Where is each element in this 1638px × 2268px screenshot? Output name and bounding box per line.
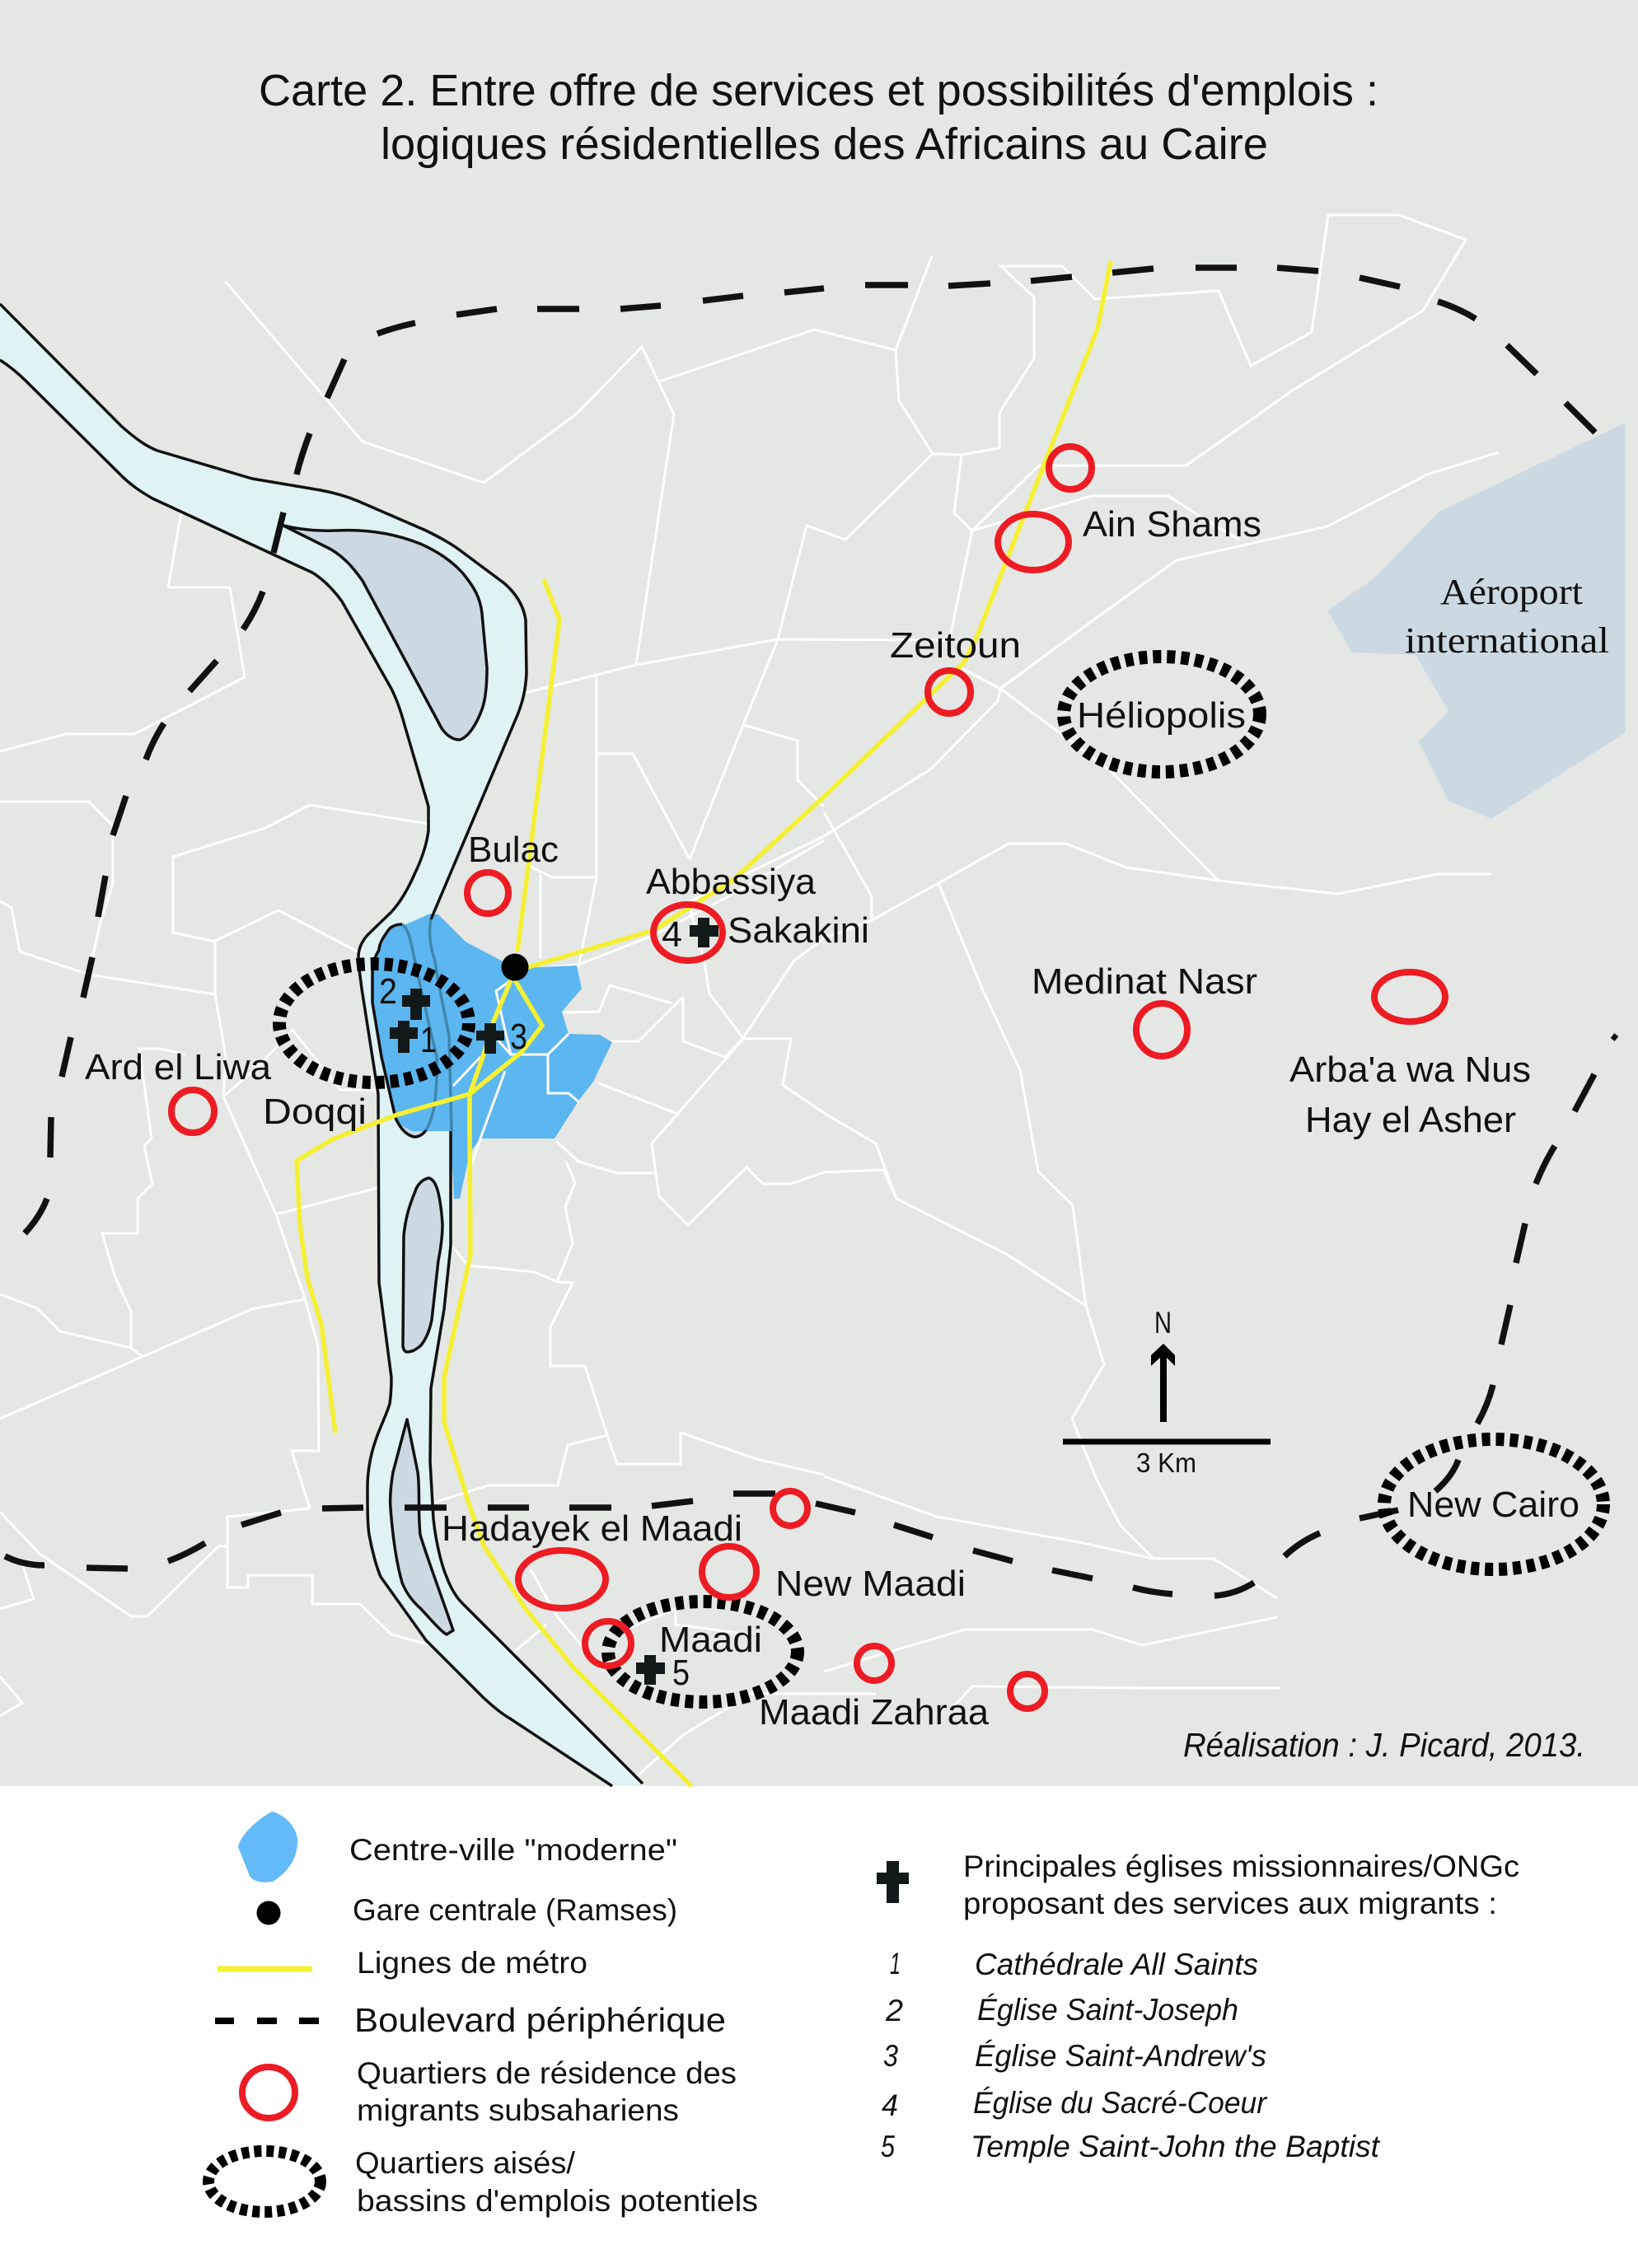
river banks [0, 304, 643, 1786]
Gezira island [372, 924, 437, 1137]
title: logiques résidentielles des Africains au Caire [381, 119, 1268, 169]
place labels: Doqqi [263, 1092, 367, 1132]
legend: wealthy districts: Quartiers aisés/ [355, 2146, 576, 2180]
title [259, 66, 1378, 169]
downtown modern centre [372, 914, 612, 1199]
wealthy districts (dashed ellipses) [279, 657, 1603, 1702]
legend: church list: Église Saint-Joseph [977, 1993, 1238, 2027]
legend: church list: 3 [883, 2039, 898, 2073]
legend: migrant districts: Quartiers de résidence des [357, 2056, 737, 2090]
metro lines [297, 261, 1111, 1786]
panel: legend [208, 1812, 1519, 2218]
river Nile [0, 304, 646, 1786]
legend: church list: Église Saint-Andrew's [975, 2039, 1266, 2073]
legend: churches: proposant des services aux migrants : [963, 1887, 1497, 1920]
downtown district boundaries [453, 980, 579, 1170]
island south of Gezira [403, 1178, 442, 1352]
place labels: Zeitoun [890, 625, 1021, 666]
legend: church list: 1 [890, 1947, 901, 1980]
peripheral ring road [5, 268, 1617, 1596]
legend: migrant districts [242, 2056, 737, 2127]
north arrow and scale bar [1063, 1306, 1271, 1478]
north arrow and scale bar: N [1154, 1306, 1172, 1340]
legend: churches [877, 1849, 1519, 1920]
place labels: 2 [379, 971, 397, 1012]
panel: map [0, 0, 1638, 1786]
legend: church list: 2 [885, 1994, 903, 2027]
legend: church list: Église du Sacré-Coeur [973, 2086, 1268, 2120]
legend: ring road: Boulevard périphérique [354, 2001, 726, 2039]
place labels: Medinat Nasr [1032, 961, 1257, 1002]
place labels: Hay el Asher [1305, 1100, 1516, 1140]
legend: metro lines [218, 1946, 587, 1980]
place labels: Ard el Liwa [85, 1047, 272, 1087]
place labels: Bulac [468, 830, 559, 870]
place labels: Sakakini [728, 910, 869, 951]
place labels: Hadayek el Maadi [442, 1508, 742, 1549]
migrant residential districts (red circles) [171, 447, 1445, 1709]
airport label: Aéroport [1440, 572, 1583, 612]
place labels: 1 [420, 1020, 437, 1060]
place labels: Maadi Zahraa [759, 1692, 990, 1733]
legend: ring road [215, 2001, 726, 2039]
legend: modern downtown [238, 1812, 677, 1882]
legend: church list: 5 [881, 2130, 895, 2163]
legend: central station: Gare centrale (Ramses) [353, 1893, 677, 1927]
island south [391, 1419, 453, 1634]
place labels: Héliopolis [1077, 695, 1246, 736]
legend: migrant districts: migrants subsahariens [357, 2093, 679, 2127]
legend: wealthy districts [208, 2146, 758, 2218]
credit: Réalisation : J. Picard, 2013. [1183, 1726, 1585, 1764]
place labels [85, 504, 1580, 1733]
north arrow and scale bar: 3 Km [1136, 1447, 1196, 1478]
legend: wealthy districts: bassins d'emplois potentiels [357, 2184, 758, 2218]
road network [0, 215, 1499, 1777]
central station [501, 954, 529, 980]
legend: modern downtown: Centre-ville "moderne" [349, 1833, 677, 1867]
north island [283, 526, 487, 740]
place labels: New Maadi [775, 1564, 966, 1604]
place labels: Maadi [659, 1620, 762, 1660]
place labels: 5 [672, 1653, 690, 1693]
place labels: Arba'a wa Nus [1289, 1050, 1531, 1090]
place labels: 3 [510, 1017, 527, 1057]
legend: church list [881, 1947, 1381, 2163]
legend: church list: Cathédrale All Saints [975, 1948, 1258, 1981]
airport area [1327, 423, 1626, 819]
title: Carte 2. Entre offre de services et possibilités d'emplois : [259, 66, 1378, 115]
place labels: 4 [662, 914, 682, 955]
place labels: Ain Shams [1083, 504, 1261, 545]
place labels: New Cairo [1407, 1485, 1580, 1525]
church crosses [390, 918, 718, 1685]
legend: church list: 4 [882, 2088, 898, 2122]
legend: church list: Temple Saint-John the Baptist [971, 2130, 1381, 2163]
place labels: Abbassiya [646, 862, 817, 902]
airport label: international [1405, 620, 1609, 661]
airport label [1405, 572, 1609, 661]
legend: metro lines: Lignes de métro [357, 1946, 587, 1980]
legend: churches: Principales églises missionnaires/ONGc [963, 1849, 1519, 1883]
